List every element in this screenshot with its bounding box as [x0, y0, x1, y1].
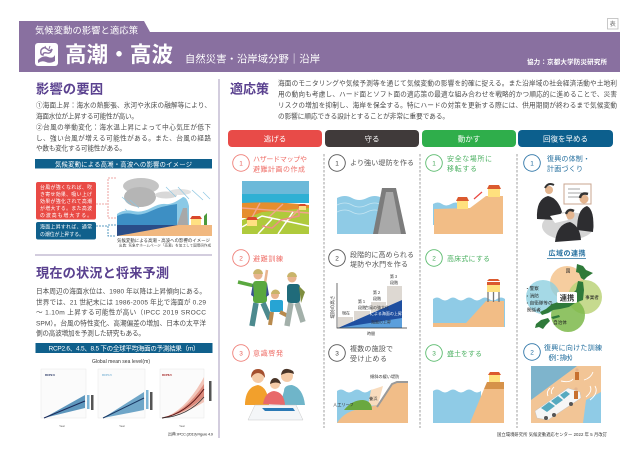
item: recovery drill: 2 [530, 349, 534, 356]
item: evacuation drill: 2 [239, 255, 243, 262]
chart: RCP4.5 [98, 369, 152, 428]
venn diagram: 関係者 [527, 306, 541, 314]
column header: evacuate [228, 130, 322, 147]
status text: 側の高波増加を予測した研究もある。 [36, 328, 145, 338]
illustration: layered coast: 人工リーフ [333, 402, 354, 407]
item: multiple facilities: 複数の施設で [350, 344, 393, 353]
chart: staged raising: 段階 [390, 279, 398, 285]
illustration: layered coast: 傾斜の緩い堤防 [370, 373, 399, 380]
adaptation text: の影響に順応できる設計とすることが非常に重要である。 [278, 112, 449, 120]
column header: protect [325, 130, 419, 147]
cooperation credit: 協力：京都大学防災研究所 [527, 57, 608, 66]
callout: storm effects: の波高も増大する。 [40, 212, 92, 219]
item: stronger seawall: 1 [335, 160, 339, 167]
panel: current status and projections [36, 264, 214, 436]
item: multiple facilities: 3 [335, 350, 339, 357]
column header: recover [518, 130, 613, 147]
item: recovery plan: 計画づくり [547, 164, 583, 173]
item: hazard map [233, 155, 309, 234]
item: relocate [426, 154, 503, 234]
chart: RCP2.6: RCP2.6 [45, 373, 55, 377]
venn diagram: 自治体 [553, 319, 567, 326]
venn diagram: ・自衛隊等の [525, 300, 553, 306]
item: regional cooperation [525, 248, 602, 332]
illustration: three people [238, 269, 305, 326]
chart: staged raising: 第１ [358, 298, 366, 304]
item: multiple facilities: 受け止める [350, 354, 387, 363]
callout: storm effects [36, 182, 96, 220]
illustration: layered coast [333, 373, 408, 423]
status text: ～ 1.10m 上昇する可能性が高い（IPCC 2019 SROCC [36, 308, 206, 316]
header band [19, 21, 620, 72]
illustration: meeting [537, 184, 594, 242]
illustration: house on stilts [433, 279, 505, 327]
callout: storm effects: 台風が強くなれば、吹 [40, 184, 92, 191]
venn diagram: 事業者 [585, 294, 599, 301]
item: awareness: 意識啓発 [253, 348, 283, 358]
venn diagram: 国 [566, 268, 571, 274]
illustration: drainage drill [531, 366, 601, 423]
chart: RCP8.5 [160, 369, 212, 428]
item: relocate: 移転する [447, 164, 477, 173]
causes text [36, 100, 211, 152]
adaptation text: 海面のモニタリングや気候予測等を通じて気候変動の影響を的確に捉える。また沿岸域の社会経済活動や土地利 [278, 78, 617, 88]
icon: storm surge [35, 43, 58, 66]
item: hazard map: ハザードマップや [253, 156, 307, 164]
item: elevated floor: 高床式にする [447, 254, 490, 263]
item: staged raising: 堤防や水門を作る [350, 260, 408, 268]
chart: staged raising: 堤防の高さ [329, 296, 336, 318]
item: stronger seawall [329, 155, 414, 234]
panel: causes [35, 80, 212, 248]
item: recovery drill: 復興に向けた訓練 [544, 343, 602, 352]
item: recovery plan: 1 [530, 160, 534, 167]
footer credit: 国立環境研究所 気候変動適応センター 2022 年 5 月改訂 [497, 431, 608, 438]
chart: RCP2.6: Year [59, 424, 65, 428]
item: evacuation drill [233, 250, 305, 326]
chart: staged raising: 第３ [390, 273, 398, 279]
item: elevated floor: 2 [432, 255, 436, 262]
chart: RCP4.5: RCP4.5 [102, 373, 112, 377]
status text: SPM）。台風の特性変化、高潮偏差の増加、日本の太平洋 [36, 318, 206, 328]
column divider [218, 79, 220, 438]
item: multiple facilities [329, 344, 408, 423]
item: staged raising: 2 [335, 255, 339, 262]
causes text: 海面水位が上昇する可能性が高い。 [36, 112, 138, 120]
illustration: family with map [245, 369, 305, 420]
item: recovery plan [524, 154, 594, 242]
brackets [96, 178, 116, 236]
item: raised ground [426, 345, 504, 423]
item: stronger seawall: より強い堤防を作る [350, 158, 414, 167]
image caption [117, 237, 212, 248]
causes text: し、強い台風が増える可能性がある。また、台風の経路 [36, 134, 211, 142]
callout: storm effects: き寄せ効果、吸い上げ [40, 191, 92, 198]
item: raised ground: 盛土をする [447, 349, 482, 358]
panel: adaptation intro [230, 78, 617, 120]
callout: sea level [36, 222, 96, 240]
item: recovery plan: 復興の体制・ [547, 154, 590, 163]
item: evacuation drill: 避難訓練 [253, 254, 283, 263]
column header: move: 動かす [458, 134, 480, 143]
item: hazard map: 1 [239, 160, 243, 167]
illustration: layered coast: 養浜 [369, 395, 378, 402]
chart: staged raising: 時間 [367, 330, 375, 336]
chart: RCP2.6 [41, 369, 94, 428]
storm surge illustration [117, 178, 212, 236]
impact image title bar: 気候変動による高潮・高波への影響のイメージ [55, 159, 193, 168]
chart title: Global mean sea level(m) [92, 359, 150, 365]
tag: table mark: 表 [610, 20, 616, 28]
column header: move [422, 130, 516, 147]
callout: storm effects: が増大する。また高波 [40, 205, 92, 212]
item: raised ground: 3 [432, 350, 436, 357]
adaptation text: 用の動向も考慮し、ハード面とソフト面の適応策の最適な組み合わせを戦略的かつ順応的に進めることで、災害 [278, 90, 617, 98]
item: awareness: 3 [239, 350, 243, 357]
chart: staged raising: 段階 [358, 304, 366, 310]
heading: adaptation: 適応策 [230, 82, 269, 96]
status text [36, 286, 206, 338]
chart: staged raising: 段階 [373, 295, 381, 301]
item: elevated floor [426, 250, 505, 327]
illustration: raised ground [433, 372, 504, 423]
chart: staged raising [329, 273, 407, 336]
item: awareness [233, 345, 305, 420]
image caption: 気候変動による高潮・高波への影響のイメージ [117, 237, 211, 244]
tag: table mark [608, 18, 618, 29]
item: relocate: 安全な場所に [447, 154, 492, 163]
chart: staged raising: 台風の強大化 [365, 304, 389, 310]
illustration: map [242, 181, 309, 234]
venn diagram: 連携 [560, 293, 574, 302]
venn diagram: ・警察 [525, 285, 539, 292]
illustration: seawall [337, 188, 406, 234]
adaptation text: リスクの増加を抑制し、海岸を保全する。特にハードの対策を更新する際には、供用期間が終わるまで気候変動 [278, 100, 617, 110]
heading: current status: 現在の状況と将来予測 [36, 264, 169, 280]
callout: storm effects: 効果が強化されて高潮 [40, 198, 92, 205]
chart: RCP8.5: RCP8.5 [162, 373, 172, 377]
venn diagram [525, 264, 602, 332]
chart: staged raising: 第２ [373, 289, 381, 295]
projection title bar: RCP2.6、4.5、8.5 下の全球平均海面の予測結果（m） [48, 344, 200, 353]
chart: staged raising: 現在 [342, 310, 350, 316]
item: relocate: 1 [432, 160, 436, 167]
item: recovery drill: （例：排水） [544, 353, 577, 362]
cooperation heading: 広域の連携 [548, 248, 586, 258]
column header: recover: 回復を早める [543, 133, 588, 143]
item: staged raising [329, 250, 414, 336]
chart: staged raising: 海面の上昇 [371, 318, 391, 324]
status text: 世界では、21 世紀末には 1986-2005 年比で海面が 0.29 [36, 298, 206, 306]
causes text: や数も変化する可能性がある。 [36, 144, 126, 152]
callout: sea level: の潮位が上昇する。 [40, 231, 84, 238]
header category tab text: 気候変動の影響と適応策 [35, 24, 138, 36]
status text: 日本周辺の海面水位は、1980 年以降は上昇傾向にある。 [36, 286, 206, 296]
chart: RCP4.5: Year [119, 424, 125, 428]
subtitle: 自然災害・沿岸域分野｜沿岸 [185, 52, 320, 66]
item: hazard map: 避難計画の作成 [253, 164, 305, 174]
illustration: relocating house [433, 185, 503, 234]
section rule [35, 254, 212, 256]
heading: causes: 影響の要因 [36, 80, 103, 96]
item: recovery drill [524, 343, 602, 423]
venn diagram: ・消防 [525, 292, 539, 300]
causes text: ②台風の挙動変化：海水温上昇によって中心気圧が低下 [36, 122, 211, 132]
image caption: 出典: 気象庁ホームページ「高潮」を加工して国環研作成 [119, 242, 212, 248]
column header: evacuate: 逃げる [264, 133, 286, 143]
main title: 高潮・高波 [65, 43, 173, 67]
column dividers [324, 154, 517, 428]
causes text: ①海面上昇：海水の熱膨張、氷河や氷床の融解等により、 [36, 100, 211, 110]
chart: staged raising: による海面の上昇 [370, 310, 402, 316]
projection title bar [36, 343, 212, 353]
source note: 出典: IPCC (2019) Figure 4.9 [168, 430, 214, 436]
adaptation text [278, 78, 617, 120]
item: staged raising: 段階的に高められる [350, 250, 414, 259]
callout: sea level: 海面上昇すれば、通常 [40, 224, 92, 230]
column header: protect: 守る [364, 134, 380, 143]
impact image title bar [35, 159, 212, 168]
chart: RCP8.5: Year [179, 424, 185, 428]
